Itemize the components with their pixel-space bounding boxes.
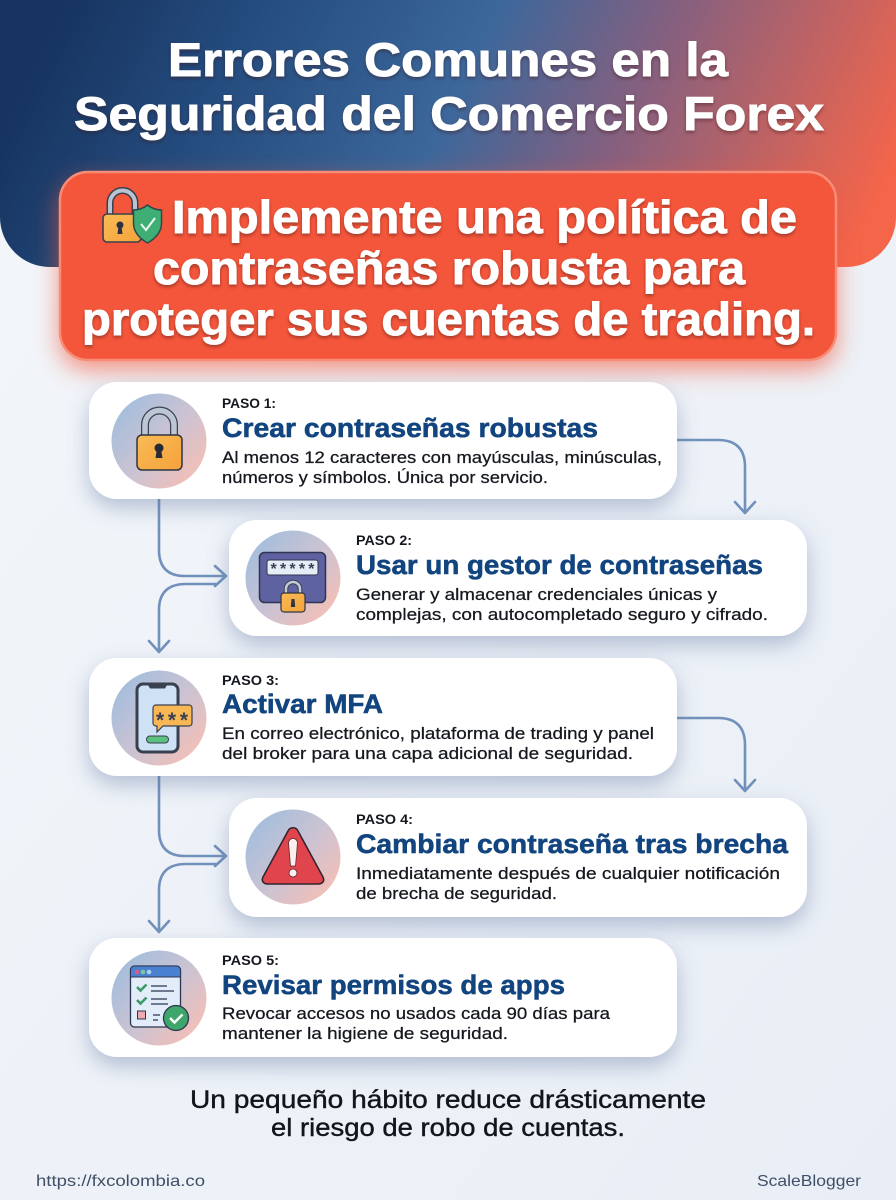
card [89, 382, 677, 499]
step description: de brecha de seguridad. [356, 885, 557, 903]
callout text: proteger sus cuentas de trading. [82, 293, 815, 345]
panel: step 5 [89, 938, 677, 1057]
card [229, 798, 807, 917]
step heading: Cambiar contraseña tras brecha [356, 829, 789, 859]
step description [222, 1005, 611, 1043]
icon: password panel with padlock: ***** [270, 561, 315, 578]
callout text: contraseñas robusta para [153, 242, 745, 294]
arrow: step 1 to step 2 left [159, 499, 226, 586]
step description: Revocar accesos no usados cada 90 días para [222, 1005, 611, 1023]
icon: phone with code bubble: *** [156, 709, 189, 732]
footer url: https://fxcolombia.co [36, 1173, 205, 1190]
step description: Inmediatamente después de cualquier notificación [356, 865, 780, 883]
arrow: step 3 to step 4 right [677, 718, 755, 791]
step label: PASO 1: [222, 396, 276, 411]
callout text: Implemente una política de [172, 191, 797, 243]
icon: padlock and shield [103, 190, 162, 243]
step description: números y símbolos. Única por servicio. [222, 468, 548, 487]
title: Errores Comunes en la [168, 33, 729, 86]
arrow: step 1 to step 2 right [677, 440, 755, 513]
step heading: Usar un gestor de contraseñas [356, 550, 763, 580]
title [74, 33, 824, 140]
icon: warning triangle [246, 810, 340, 904]
step description [222, 449, 662, 487]
step description: mantener la higiene de seguridad. [222, 1025, 508, 1043]
closing message: el riesgo de robo de cuentas. [271, 1114, 625, 1142]
step description: En correo electrónico, plataforma de trading y panel [222, 725, 654, 743]
closing message [190, 1086, 706, 1142]
step description: Generar y almacenar credenciales únicas y [356, 586, 718, 604]
callout panel [60, 172, 836, 360]
arrow: step 2 back to step 3 [149, 584, 216, 652]
step heading: Revisar permisos de apps [222, 970, 565, 1000]
step description: Al menos 12 caracteres con mayúsculas, minúsculas, [222, 449, 662, 467]
step heading: Activar MFA [222, 689, 383, 719]
icon: password panel with padlock [246, 530, 340, 626]
icon: phone with code bubble [112, 670, 206, 766]
step label: PASO 5: [222, 953, 279, 968]
arrow: step 3 to step 4 left [159, 776, 226, 866]
card [89, 938, 677, 1057]
panel: step 2 [229, 520, 807, 636]
callout text [82, 191, 815, 345]
step description: complejas, con autocompletado seguro y cifrado. [356, 606, 768, 624]
step description [356, 586, 768, 624]
step label: PASO 3: [222, 673, 279, 688]
closing message: Un pequeño hábito reduce drásticamente [190, 1086, 706, 1114]
title: Seguridad del Comercio Forex [74, 87, 824, 140]
icon: permissions checklist [112, 950, 206, 1046]
step description [222, 725, 654, 763]
arrow: step 4 back to step 5 [149, 864, 216, 932]
card [229, 520, 807, 636]
step label: PASO 4: [356, 812, 413, 827]
panel: step 1 [89, 382, 677, 499]
step description: del broker para una capa adicional de seguridad. [222, 745, 633, 763]
callout background [60, 172, 836, 360]
card [89, 658, 677, 776]
step label: PASO 2: [356, 533, 412, 548]
panel: step 3 [89, 658, 677, 776]
step description [356, 865, 780, 903]
header band [0, 0, 896, 267]
step heading: Crear contraseñas robustas [222, 413, 598, 443]
footer brand: ScaleBlogger [757, 1173, 862, 1190]
icon: padlock [112, 394, 206, 488]
panel: step 4 [229, 798, 807, 917]
